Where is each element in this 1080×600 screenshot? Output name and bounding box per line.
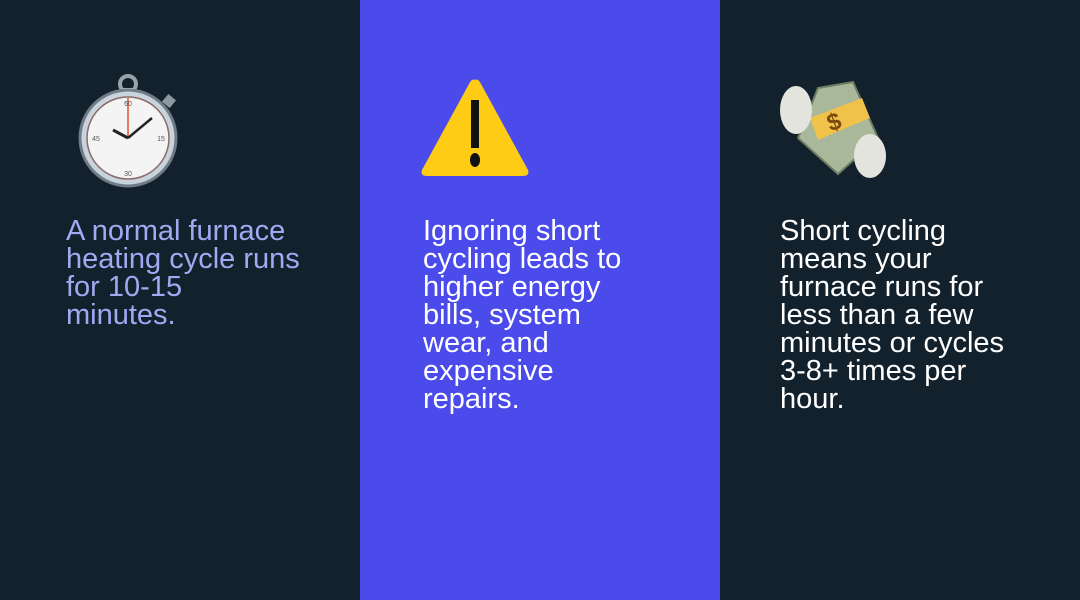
text: consequences: wear, and (423, 327, 549, 359)
text: definition: Short cycling (780, 215, 946, 247)
text: consequences: Ignoring short (423, 215, 600, 247)
icon: warning (422, 80, 528, 176)
text: consequences (423, 215, 621, 415)
text: definition (780, 215, 1004, 415)
text: consequences: cycling leads to (423, 243, 621, 275)
text: definition: 3-8+ times per (780, 355, 966, 387)
text: definition: means your (780, 243, 932, 275)
text: definition: furnace runs for (780, 271, 983, 303)
text: definition: minutes or cycles (780, 327, 1004, 359)
icon: stopwatch: 30 (124, 171, 132, 178)
text: normal cycle: A normal furnace (66, 215, 285, 247)
icon: money with wings: $ (823, 107, 846, 137)
text: normal cycle: for 10-15 (66, 271, 182, 303)
icon: stopwatch: 60 (124, 101, 132, 108)
text: consequences: repairs. (423, 383, 520, 415)
text: definition: less than a few (780, 299, 973, 331)
panel: consequences (360, 0, 720, 600)
icon: stopwatch: 45 (92, 136, 100, 143)
text: consequences: bills, system (423, 299, 581, 331)
text: normal cycle (66, 215, 300, 331)
text: consequences: higher energy (423, 271, 600, 303)
panel: definition (720, 0, 1080, 600)
text: normal cycle: heating cycle runs (66, 243, 300, 275)
text: consequences: expensive (423, 355, 554, 387)
icon: stopwatch (78, 74, 178, 188)
text: definition: hour. (780, 383, 844, 415)
icon: stopwatch: 15 (157, 136, 165, 143)
panel: normal cycle (0, 0, 360, 600)
icon: money with wings (780, 80, 886, 178)
text: normal cycle: minutes. (66, 299, 176, 331)
